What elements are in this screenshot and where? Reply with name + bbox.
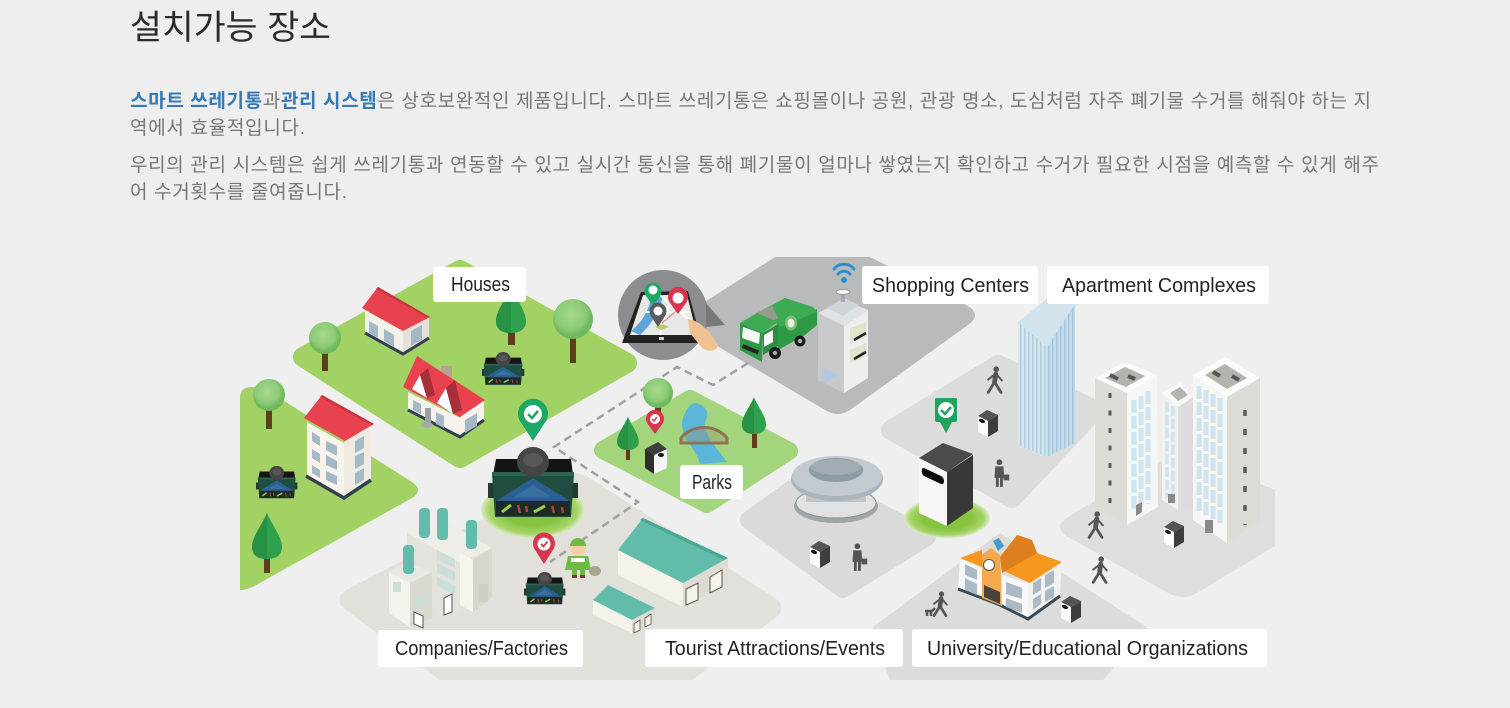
factory buildings (389, 518, 492, 628)
label: Shopping Centers (862, 266, 1038, 304)
warehouse: large (618, 518, 728, 607)
apartment: right tower (1193, 357, 1260, 543)
pin: red park (646, 410, 664, 434)
paragraph 2 line 2: 어 수거횟수를 줄여줍니다. (130, 181, 347, 203)
small bin (1164, 521, 1184, 548)
factory chimneys (403, 508, 477, 574)
tree (253, 379, 285, 429)
paragraph 2 line 1: 우리의 관리 시스템은 쉽게 쓰레기통과 연동할 수 있고 실시간 통신을 통해 폐기물이 얼마나 쌓였는지 확인하고 수거가 필요한 시점을 예측할 수 있게 해주 (130, 154, 1379, 176)
house: small red roof (362, 287, 430, 355)
label: Apartment Complexes (1047, 266, 1269, 304)
dumpster: factory (524, 572, 565, 604)
label: Parks (680, 465, 743, 499)
label: University/Educational Organizations (912, 629, 1267, 667)
tablet with map (618, 270, 725, 360)
person with dog (925, 591, 947, 616)
apartment: middle tower (1162, 383, 1193, 510)
label: Tourist Attractions/Events: Tourist Attractions/Events (665, 638, 885, 660)
house: tall red roof (304, 395, 374, 498)
tree (309, 322, 341, 371)
smart bin: main (919, 443, 973, 526)
ground: park block (603, 399, 789, 504)
worker character (565, 538, 601, 578)
ground: houses block (303, 270, 627, 458)
ground: shopping block (690, 257, 975, 414)
tree (553, 299, 593, 363)
tree (496, 287, 526, 345)
data tower (818, 290, 868, 393)
smart bin: park (645, 442, 667, 474)
ground: left green block (240, 387, 418, 590)
stadium (791, 456, 883, 523)
label: Houses (433, 267, 526, 302)
label: Shopping Centers: Shopping Centers (872, 275, 1029, 297)
house: large with dormers (403, 356, 485, 438)
person walking (988, 366, 1002, 392)
person with briefcase (852, 543, 867, 571)
label: Houses: Houses (451, 274, 510, 296)
paragraph 1 line 1: 스마트 쓰레기통과관리 시스템은 상호보완적인 제품입니다. 스마트 쓰레기통은 쇼핑몰이나 공원, 관광 명소, 도심처럼 자주 폐기물 수거를 해줘야 하는 지 (130, 90, 1371, 112)
tree (617, 417, 639, 460)
stream and bridge (681, 403, 727, 464)
warehouse: small (593, 585, 655, 633)
person walking (1093, 556, 1107, 582)
person walking (1089, 511, 1103, 537)
ground: beige companies block (339, 473, 782, 680)
dashed route lines (550, 363, 748, 562)
school (958, 535, 1062, 619)
icon: wifi (834, 264, 854, 282)
ground: university block (873, 533, 1147, 680)
small bin (810, 541, 830, 568)
illustration: smart city map (240, 257, 1275, 680)
dumpster: houses (482, 352, 524, 385)
garbage truck (740, 298, 817, 362)
label: Companies/Factories (378, 630, 583, 667)
tree (252, 513, 282, 573)
label: Apartment Complexes: Apartment Complexes (1062, 275, 1256, 297)
label: Parks: Parks (692, 472, 732, 494)
label: Companies/Factories: Companies/Factories (395, 638, 568, 660)
small bin (1061, 596, 1081, 623)
ground: centre block (891, 365, 1095, 498)
label: Tourist Attractions/Events (645, 629, 903, 667)
dumpster: left block (256, 466, 297, 498)
ground: apartment block (1060, 450, 1275, 597)
text block: introduction (130, 90, 1379, 203)
smart bin glow (904, 498, 990, 538)
dumpster: main (488, 447, 578, 517)
pin: green main (518, 399, 548, 441)
label: University/Educational Organizations: University/Educational Organizations (927, 638, 1248, 660)
apartment: left tower (1095, 362, 1158, 525)
glass tower (1018, 298, 1078, 457)
ground: tourist block (749, 476, 927, 589)
person with briefcase (994, 459, 1009, 487)
pin: green flag (935, 398, 957, 433)
tree (643, 378, 673, 419)
dumpster glow (481, 482, 585, 538)
title: 설치가능 장소 (130, 9, 331, 47)
tree (742, 397, 766, 448)
pin: red factory (533, 532, 555, 564)
paragraph 1 line 2: 역에서 효율적입니다. (130, 117, 305, 139)
small bin (978, 410, 998, 437)
